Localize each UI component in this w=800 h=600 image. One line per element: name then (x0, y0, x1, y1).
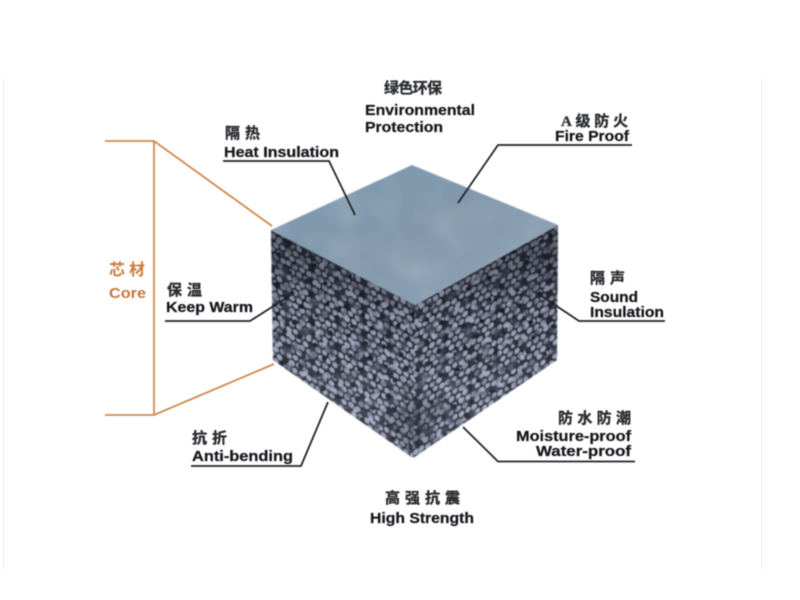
callout: moisture and water proof (463, 409, 635, 462)
Chinese label: 高强抗震 (385, 489, 460, 507)
English label (365, 103, 475, 136)
insulation block cube (271, 165, 558, 458)
Chinese label: 防水防潮 (558, 409, 631, 427)
leader line (463, 427, 635, 462)
callout: fire proof (458, 112, 632, 203)
top face mottling (271, 165, 558, 305)
Chinese label: 隔声 (590, 269, 625, 287)
image frame edges (4, 78, 762, 570)
Chinese label: 绿色环保 (384, 79, 442, 97)
English label: Heat Insulation (224, 145, 339, 161)
core bracket (105, 141, 274, 415)
core label English: Core (109, 286, 146, 302)
top face (271, 165, 558, 305)
leader line (165, 295, 291, 321)
callout: sound insulation (540, 269, 665, 321)
bottom edge dark creases (385, 395, 455, 450)
callout: high strength (370, 489, 474, 527)
leader line (191, 402, 328, 466)
callout: keep warm (165, 282, 291, 321)
English label: Moisture-proof (516, 429, 631, 445)
leader line (540, 295, 665, 321)
Chinese label: 隔热 (225, 125, 260, 142)
core label Chinese: 芯材 (109, 260, 145, 279)
English label: Insulation (590, 305, 664, 321)
bracket lines (105, 141, 274, 415)
leader line (458, 145, 632, 203)
English label: Anti-bending (192, 449, 293, 465)
English label: Protection (365, 120, 443, 136)
Chinese label: A级防火 (561, 112, 628, 130)
Chinese label: 抗折 (192, 429, 227, 447)
callout: heat insulation (223, 125, 355, 215)
callout: anti-bending (191, 402, 328, 466)
Chinese label: 保温 (167, 282, 202, 299)
left face (271, 230, 415, 458)
English label: Keep Warm (166, 300, 253, 316)
English label: High Strength (370, 511, 474, 527)
English label: Water-proof (536, 444, 631, 460)
English label (516, 429, 631, 460)
core label (109, 260, 146, 302)
English label: Environmental (365, 103, 475, 119)
right face (413, 225, 558, 458)
leader line (223, 161, 355, 215)
English label: Fire Proof (555, 129, 629, 145)
English label: Sound (590, 290, 638, 306)
English label (590, 290, 664, 321)
callout: environmental protection (365, 79, 475, 136)
